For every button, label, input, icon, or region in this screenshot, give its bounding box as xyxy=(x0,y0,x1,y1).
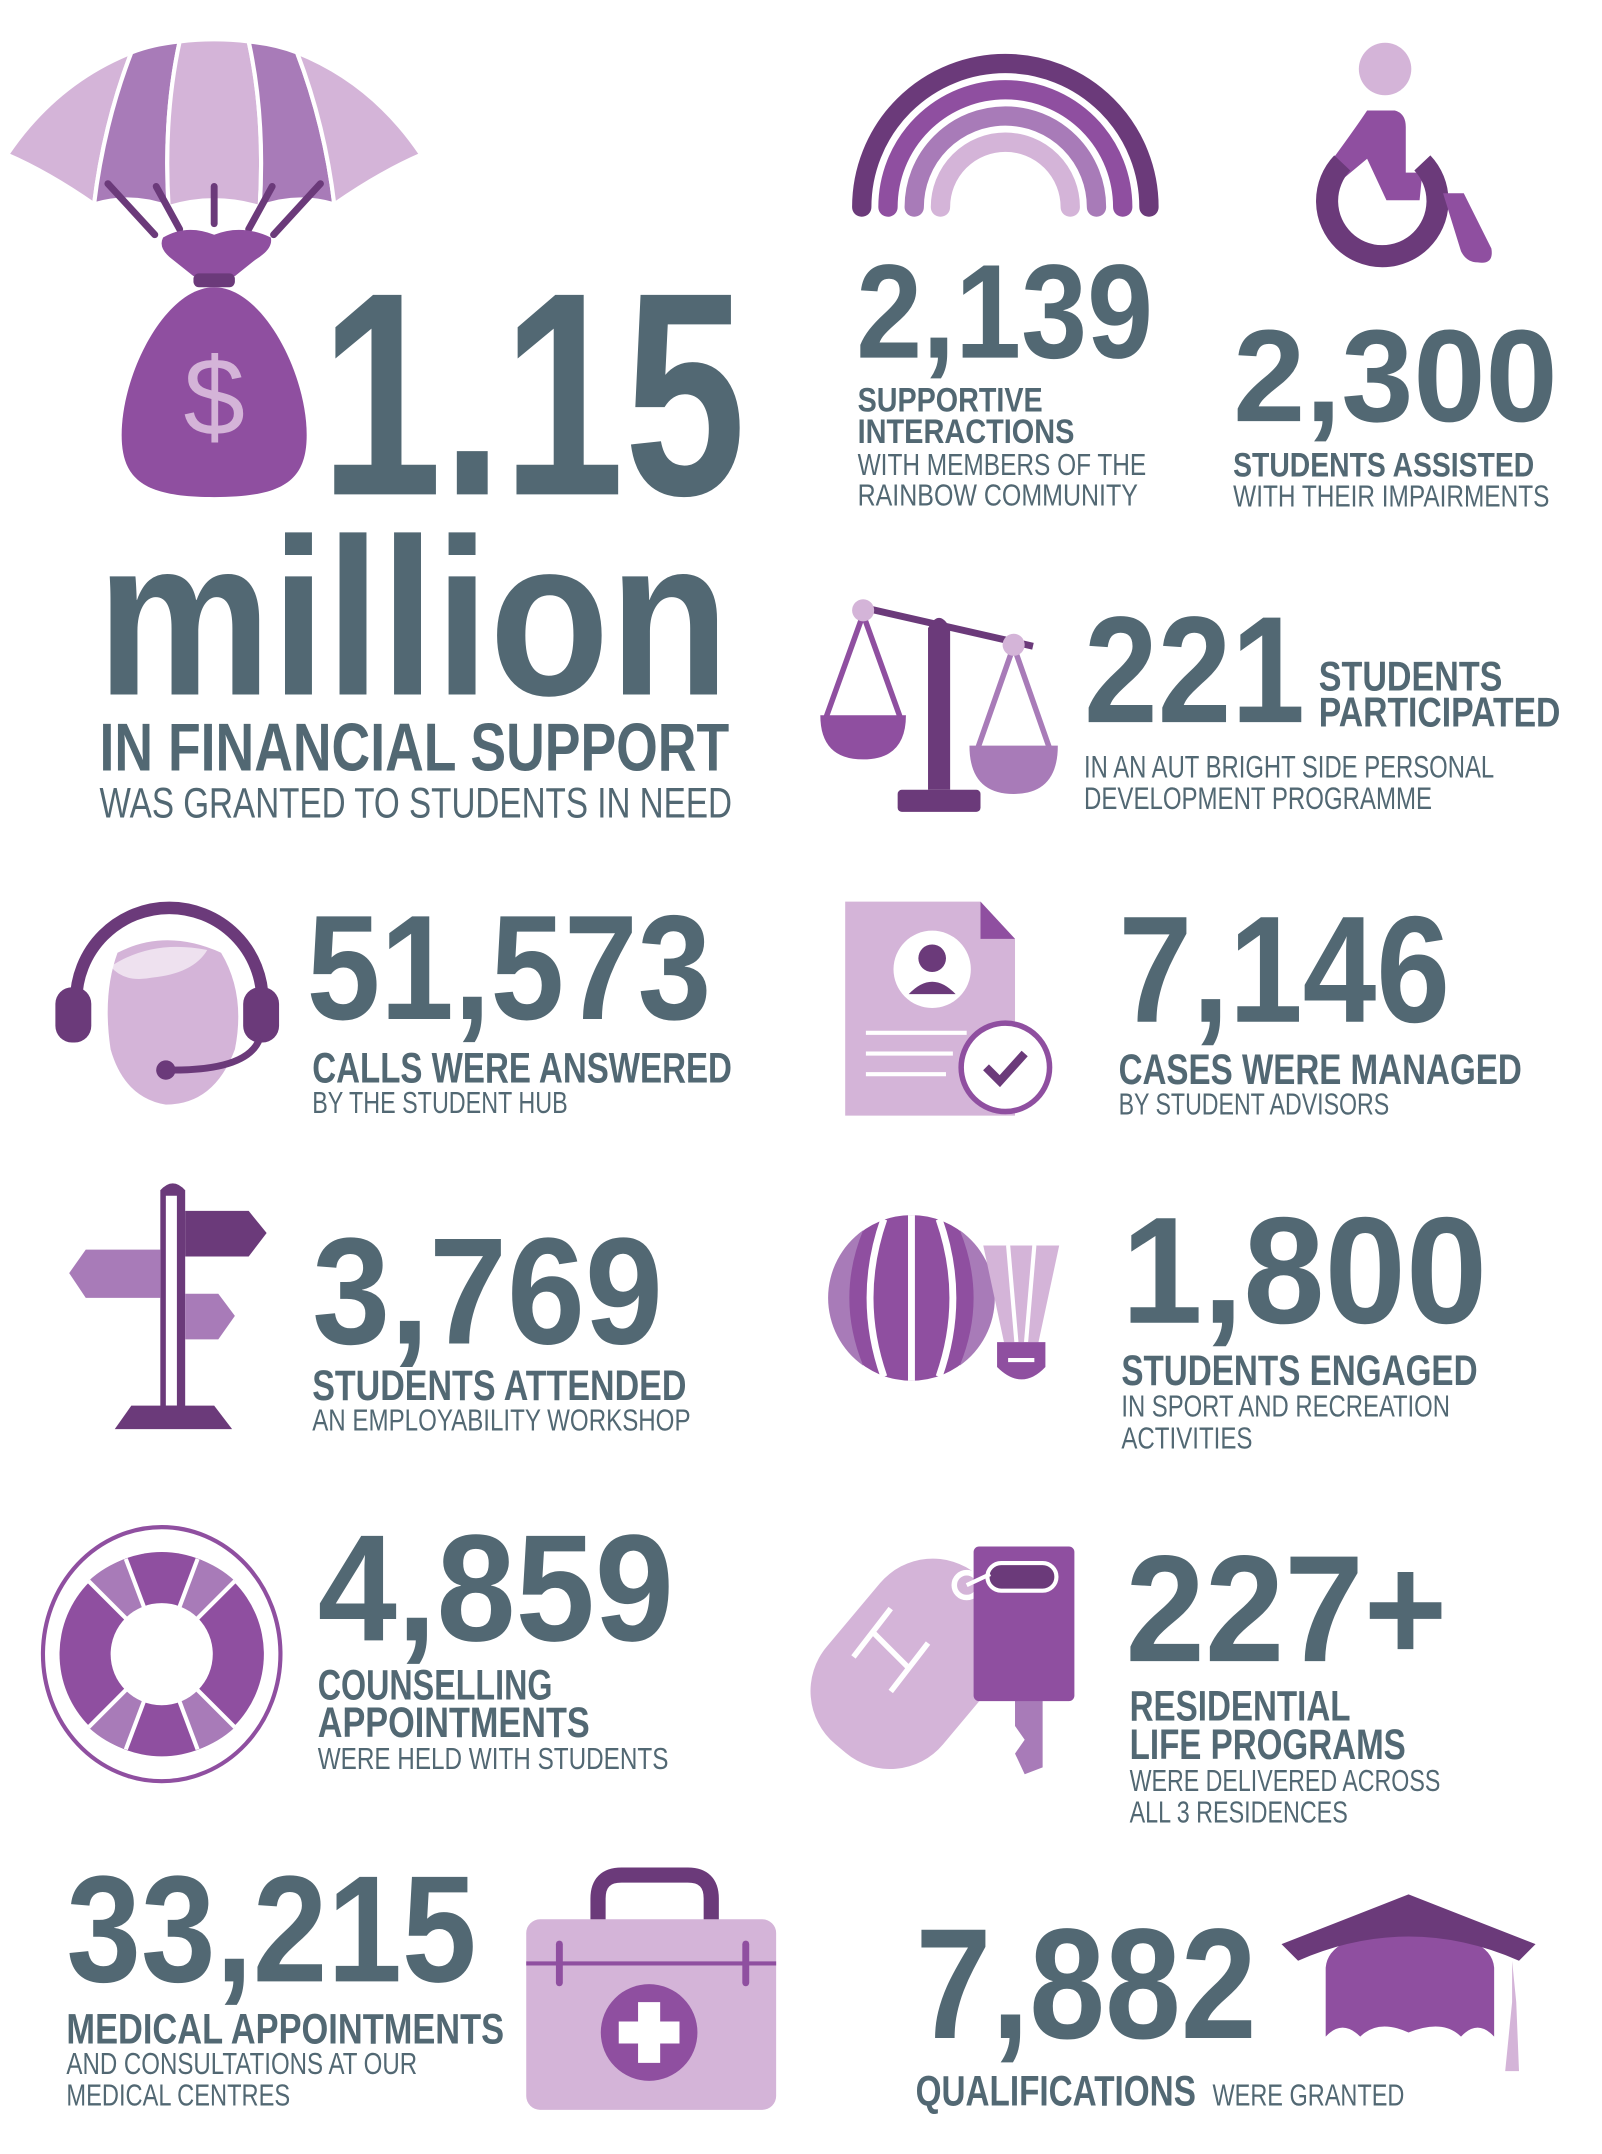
icon: rainbow xyxy=(862,64,1149,207)
stat: cases: BY STUDENT ADVISORS xyxy=(1119,1088,1389,1121)
icon: parachute money bag xyxy=(7,39,421,497)
stat: qualifications: QUALIFICATIONS xyxy=(916,2068,1196,2116)
stat: qualifications: WERE GRANTED xyxy=(1212,2080,1404,2113)
icon: scales xyxy=(820,599,1058,812)
stat: sport: STUDENTS ENGAGED xyxy=(1121,1347,1478,1395)
stat: rainbow community: WITH MEMBERS OF THE xyxy=(858,449,1146,482)
stat: bright side: 221 xyxy=(1084,586,1305,755)
stat: bright side: DEVELOPMENT PROGRAMME xyxy=(1084,780,1432,816)
stat: rainbow community: 2,139 xyxy=(856,238,1153,387)
stat: calls: BY THE STUDENT HUB xyxy=(312,1087,568,1120)
stat: counselling xyxy=(318,1504,674,1776)
stat: rainbow community xyxy=(856,238,1153,512)
icon: key tag xyxy=(782,1530,1074,1797)
stat: medical: MEDICAL CENTRES xyxy=(66,2080,290,2113)
stat: bright side xyxy=(1084,586,1560,816)
stat: residential xyxy=(1125,1525,1447,1830)
stat: counselling: APPOINTMENTS xyxy=(318,1699,590,1747)
stat: calls: CALLS WERE ANSWERED xyxy=(312,1045,732,1093)
icon: graduation cap xyxy=(1282,1894,1536,2071)
icon: signpost xyxy=(69,1183,267,1429)
stat: sport: ACTIVITIES xyxy=(1121,1422,1253,1455)
icon: medical kit xyxy=(526,1875,776,2110)
stat: medical xyxy=(66,1845,504,2113)
stat: sport xyxy=(1121,1187,1487,1455)
stat: impairments: 2,300 xyxy=(1233,302,1558,449)
heading: 1.15 million: IN FINANCIAL SUPPORT xyxy=(100,710,729,785)
stat: sport: 1,800 xyxy=(1121,1187,1487,1356)
stat: qualifications xyxy=(916,1897,1404,2116)
stat: bright side: STUDENTS xyxy=(1319,653,1502,699)
stat: employability: AN EMPLOYABILITY WORKSHOP xyxy=(312,1404,691,1437)
stat: sport: IN SPORT AND RECREATION xyxy=(1121,1391,1450,1424)
stat: impairments xyxy=(1233,302,1558,514)
heading: 1.15 million xyxy=(97,233,746,827)
icon: headset xyxy=(55,908,279,1105)
stat: counselling: WERE HELD WITH STUDENTS xyxy=(318,1743,668,1776)
stat: impairments: STUDENTS ASSISTED xyxy=(1233,446,1534,484)
stat: counselling: COUNSELLING xyxy=(318,1662,552,1710)
stat: residential: 227+ xyxy=(1125,1525,1447,1694)
stat: cases xyxy=(1119,886,1522,1121)
stat: medical: MEDICAL APPOINTMENTS xyxy=(66,2006,504,2054)
stat: medical: 33,215 xyxy=(66,1845,477,2014)
stat: medical: AND CONSULTATIONS AT OUR xyxy=(66,2048,417,2081)
heading: 1.15 million: WAS GRANTED TO STUDENTS IN NEED xyxy=(100,779,732,827)
icon: case document xyxy=(845,902,1050,1116)
icon: lifebuoy xyxy=(43,1527,280,1781)
icon: parachute money bag: $ xyxy=(183,336,245,459)
stat: rainbow community: INTERACTIONS xyxy=(858,413,1074,451)
stat: calls: 51,573 xyxy=(307,884,711,1051)
stat: employability: STUDENTS ATTENDED xyxy=(312,1362,686,1410)
stat: rainbow community: RAINBOW COMMUNITY xyxy=(858,479,1138,512)
stat: qualifications: 7,882 xyxy=(916,1897,1257,2072)
stat: counselling: 4,859 xyxy=(318,1504,674,1673)
stat: residential: RESIDENTIAL xyxy=(1130,1682,1351,1730)
stat: calls xyxy=(307,884,732,1120)
stat: employability: 3,769 xyxy=(312,1207,663,1376)
stat: residential: ALL 3 RESIDENCES xyxy=(1130,1797,1348,1830)
icon: ball and shuttlecock xyxy=(828,1215,1059,1381)
heading: 1.15 million: million xyxy=(97,494,729,743)
heading: 1.15 million: 1.15 xyxy=(320,233,746,556)
stat: residential: LIFE PROGRAMS xyxy=(1130,1721,1406,1769)
stat: cases: 7,146 xyxy=(1119,886,1450,1055)
stat: rainbow community: SUPPORTIVE xyxy=(858,381,1043,419)
stat: residential: WERE DELIVERED ACROSS xyxy=(1130,1765,1440,1798)
icon: wheelchair xyxy=(1327,43,1492,263)
